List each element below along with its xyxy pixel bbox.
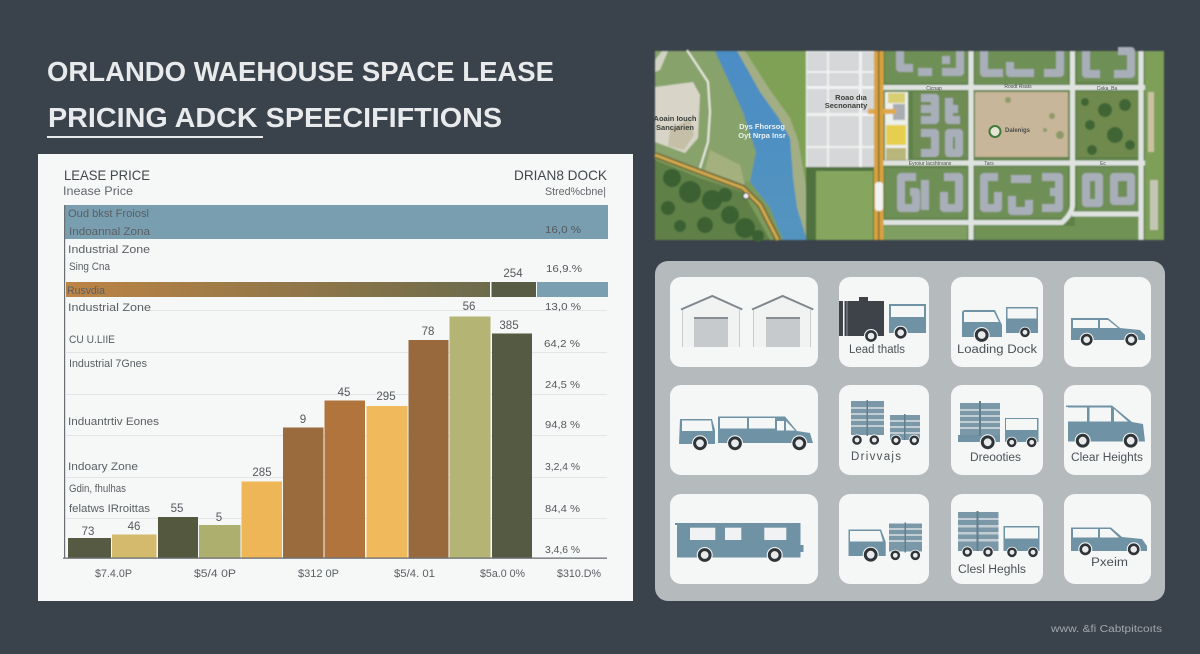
percentage column: 3,2,4 %: [545, 461, 580, 473]
bar value labels: 5: [216, 512, 222, 524]
row labels: [67, 208, 160, 515]
bar value labels: 78: [422, 326, 434, 338]
icon: van pair: [679, 416, 813, 451]
card: vans: [670, 385, 818, 475]
map labels: Dalenigs: [1005, 128, 1031, 134]
label: Drivvajs: [851, 451, 901, 463]
percentage column: 64,2 %: [544, 338, 580, 350]
icon: cab with stack: [848, 522, 922, 563]
card: warehouses: [670, 277, 818, 367]
map labels: Eyroiur lacshtrvans: [909, 161, 952, 167]
footer url: www. &fi Cabtpitcoıts: [1050, 624, 1162, 635]
river: [715, 51, 807, 240]
panel heading: lease price: LEASE PRICE: [64, 167, 150, 183]
bar value labels: 73: [82, 526, 94, 538]
row labels: Induantrtiv Eones: [68, 416, 160, 428]
map labels: Rosdt Rsats: [1004, 84, 1032, 90]
bar value labels: 385: [499, 320, 519, 332]
map labels: Dys Fhorsog: [739, 122, 785, 131]
east blocks: [883, 51, 1164, 240]
x axis labels: $310.D%: [557, 568, 601, 580]
icon: stack and trailer: [958, 401, 1038, 450]
x axis labels: [95, 568, 601, 580]
row labels: Industrial Zone: [68, 244, 150, 256]
panel heading: lease price: [63, 167, 150, 198]
percentage column: 94,8 %: [545, 419, 580, 431]
streets: [883, 51, 1145, 240]
icon: dark truck: [839, 297, 926, 343]
panel: specifications: [655, 261, 1165, 601]
card: clear heights: [1064, 385, 1151, 475]
curved road: [655, 155, 778, 240]
percentage column: 16,9.%: [546, 263, 582, 275]
panel heading: dock: DRIAN8 DOCK: [514, 167, 608, 183]
percentage column: 84,4 %: [545, 503, 580, 515]
card: cab and stack: [839, 494, 929, 584]
x axis labels: $5a.0 0%: [480, 568, 525, 580]
row labels: Industrial Zone: [68, 302, 151, 314]
row labels: Sing Cna: [69, 261, 111, 273]
row labels: felatws IRroittas: [69, 503, 151, 515]
orange band: [66, 282, 608, 297]
row labels: CU U.LIIE: [69, 334, 115, 346]
title: [47, 56, 554, 138]
label: Loading Dock: [957, 344, 1037, 356]
label: Clear Heights: [1071, 452, 1143, 464]
icon: warehouse right: [752, 296, 813, 347]
map labels: Tars: [984, 161, 994, 167]
card: suv: [1064, 277, 1151, 367]
row labels: Indoary Zone: [68, 461, 138, 473]
yellow parcels: [885, 92, 908, 160]
label: Pxeim: [1091, 557, 1128, 569]
bar value labels: [82, 268, 523, 538]
bar value labels: 254: [503, 268, 523, 280]
bar value labels: 45: [338, 387, 350, 399]
icon: tall van: [1066, 406, 1145, 449]
bar chart: [68, 316, 532, 558]
icon: stack and trailer: [958, 511, 1040, 558]
map labels: Sancjarien: [656, 123, 694, 132]
bar value labels: 295: [376, 391, 396, 403]
icon: suv: [1071, 528, 1147, 556]
map labels: [654, 84, 1117, 167]
percentage column: 13,0 %: [545, 301, 581, 313]
buildings: [900, 51, 1131, 211]
row labels: Industrial 7Gnes: [69, 358, 147, 370]
map labels: Ec: [1100, 161, 1106, 167]
label: Dreooties: [970, 452, 1021, 464]
bar value labels: 56: [463, 301, 475, 313]
map labels: Oyt Nrpa Insr: [738, 131, 786, 140]
icon: suv: [1071, 318, 1145, 347]
row labels: Indoannal Zona: [69, 226, 151, 238]
city grid: [806, 51, 876, 167]
card: loading dock: [951, 277, 1043, 367]
bar value labels: 285: [252, 467, 272, 479]
map labels: Ceka_Ba: [1097, 86, 1117, 92]
title: ORLANDO WAEHOUSE SPACE LEASE: [47, 56, 554, 87]
map artwork: [655, 50, 1164, 242]
axes: [63, 205, 607, 559]
panel heading: dock: [514, 167, 608, 198]
map labels: Roao dıa: [835, 93, 868, 102]
icon: loading truck: [962, 307, 1038, 343]
card: bus: [670, 494, 818, 584]
x axis labels: $312 0P: [298, 568, 339, 580]
bar value labels: 9: [300, 414, 306, 426]
bar value labels: 46: [128, 521, 140, 533]
card: dreooties: [951, 385, 1043, 475]
row labels: Rusvdia: [67, 285, 106, 297]
panel: lease price chart: [38, 154, 633, 601]
map labels: Secnonanty: [825, 101, 868, 110]
row labels: Oud bkst Froiosl: [68, 208, 149, 220]
aerial map: [654, 50, 1164, 242]
title: PRICING ADCK SPEECIFIFTIONS: [48, 102, 502, 133]
x axis labels: $7.4.0P: [95, 568, 132, 580]
panel heading: lease price: Inease Price: [63, 186, 133, 198]
bar value labels: 55: [171, 503, 183, 515]
card: pxeim: [1064, 494, 1151, 584]
percentage column: [544, 224, 582, 556]
map labels: Cicnap: [926, 86, 942, 92]
panel heading: dock: Stred%cbne|: [545, 186, 606, 198]
card: drivways: [839, 385, 929, 475]
blue band: [65, 205, 608, 239]
icon: bus: [675, 523, 804, 563]
label: Lead thatls: [849, 344, 905, 356]
percentage column: 16,0 %: [545, 224, 581, 236]
card: lead thatls: [839, 277, 929, 367]
percentage column: 24,5 %: [545, 379, 580, 391]
map labels: Aoain Iouch: [654, 114, 697, 123]
x axis labels: $5/4 0P: [194, 568, 236, 580]
label: Clesl Heghls: [958, 564, 1026, 576]
x axis labels: $5/4. 01: [394, 568, 435, 580]
map marker: [990, 126, 1000, 137]
icon: warehouse left: [681, 296, 742, 347]
row labels: Gdin, fhulhas: [69, 483, 126, 495]
icon: pallet stacks: [851, 400, 920, 446]
percentage column: 3,4,6 %: [545, 544, 580, 556]
card: clesl heghls: [951, 494, 1043, 584]
main road: [874, 51, 884, 240]
